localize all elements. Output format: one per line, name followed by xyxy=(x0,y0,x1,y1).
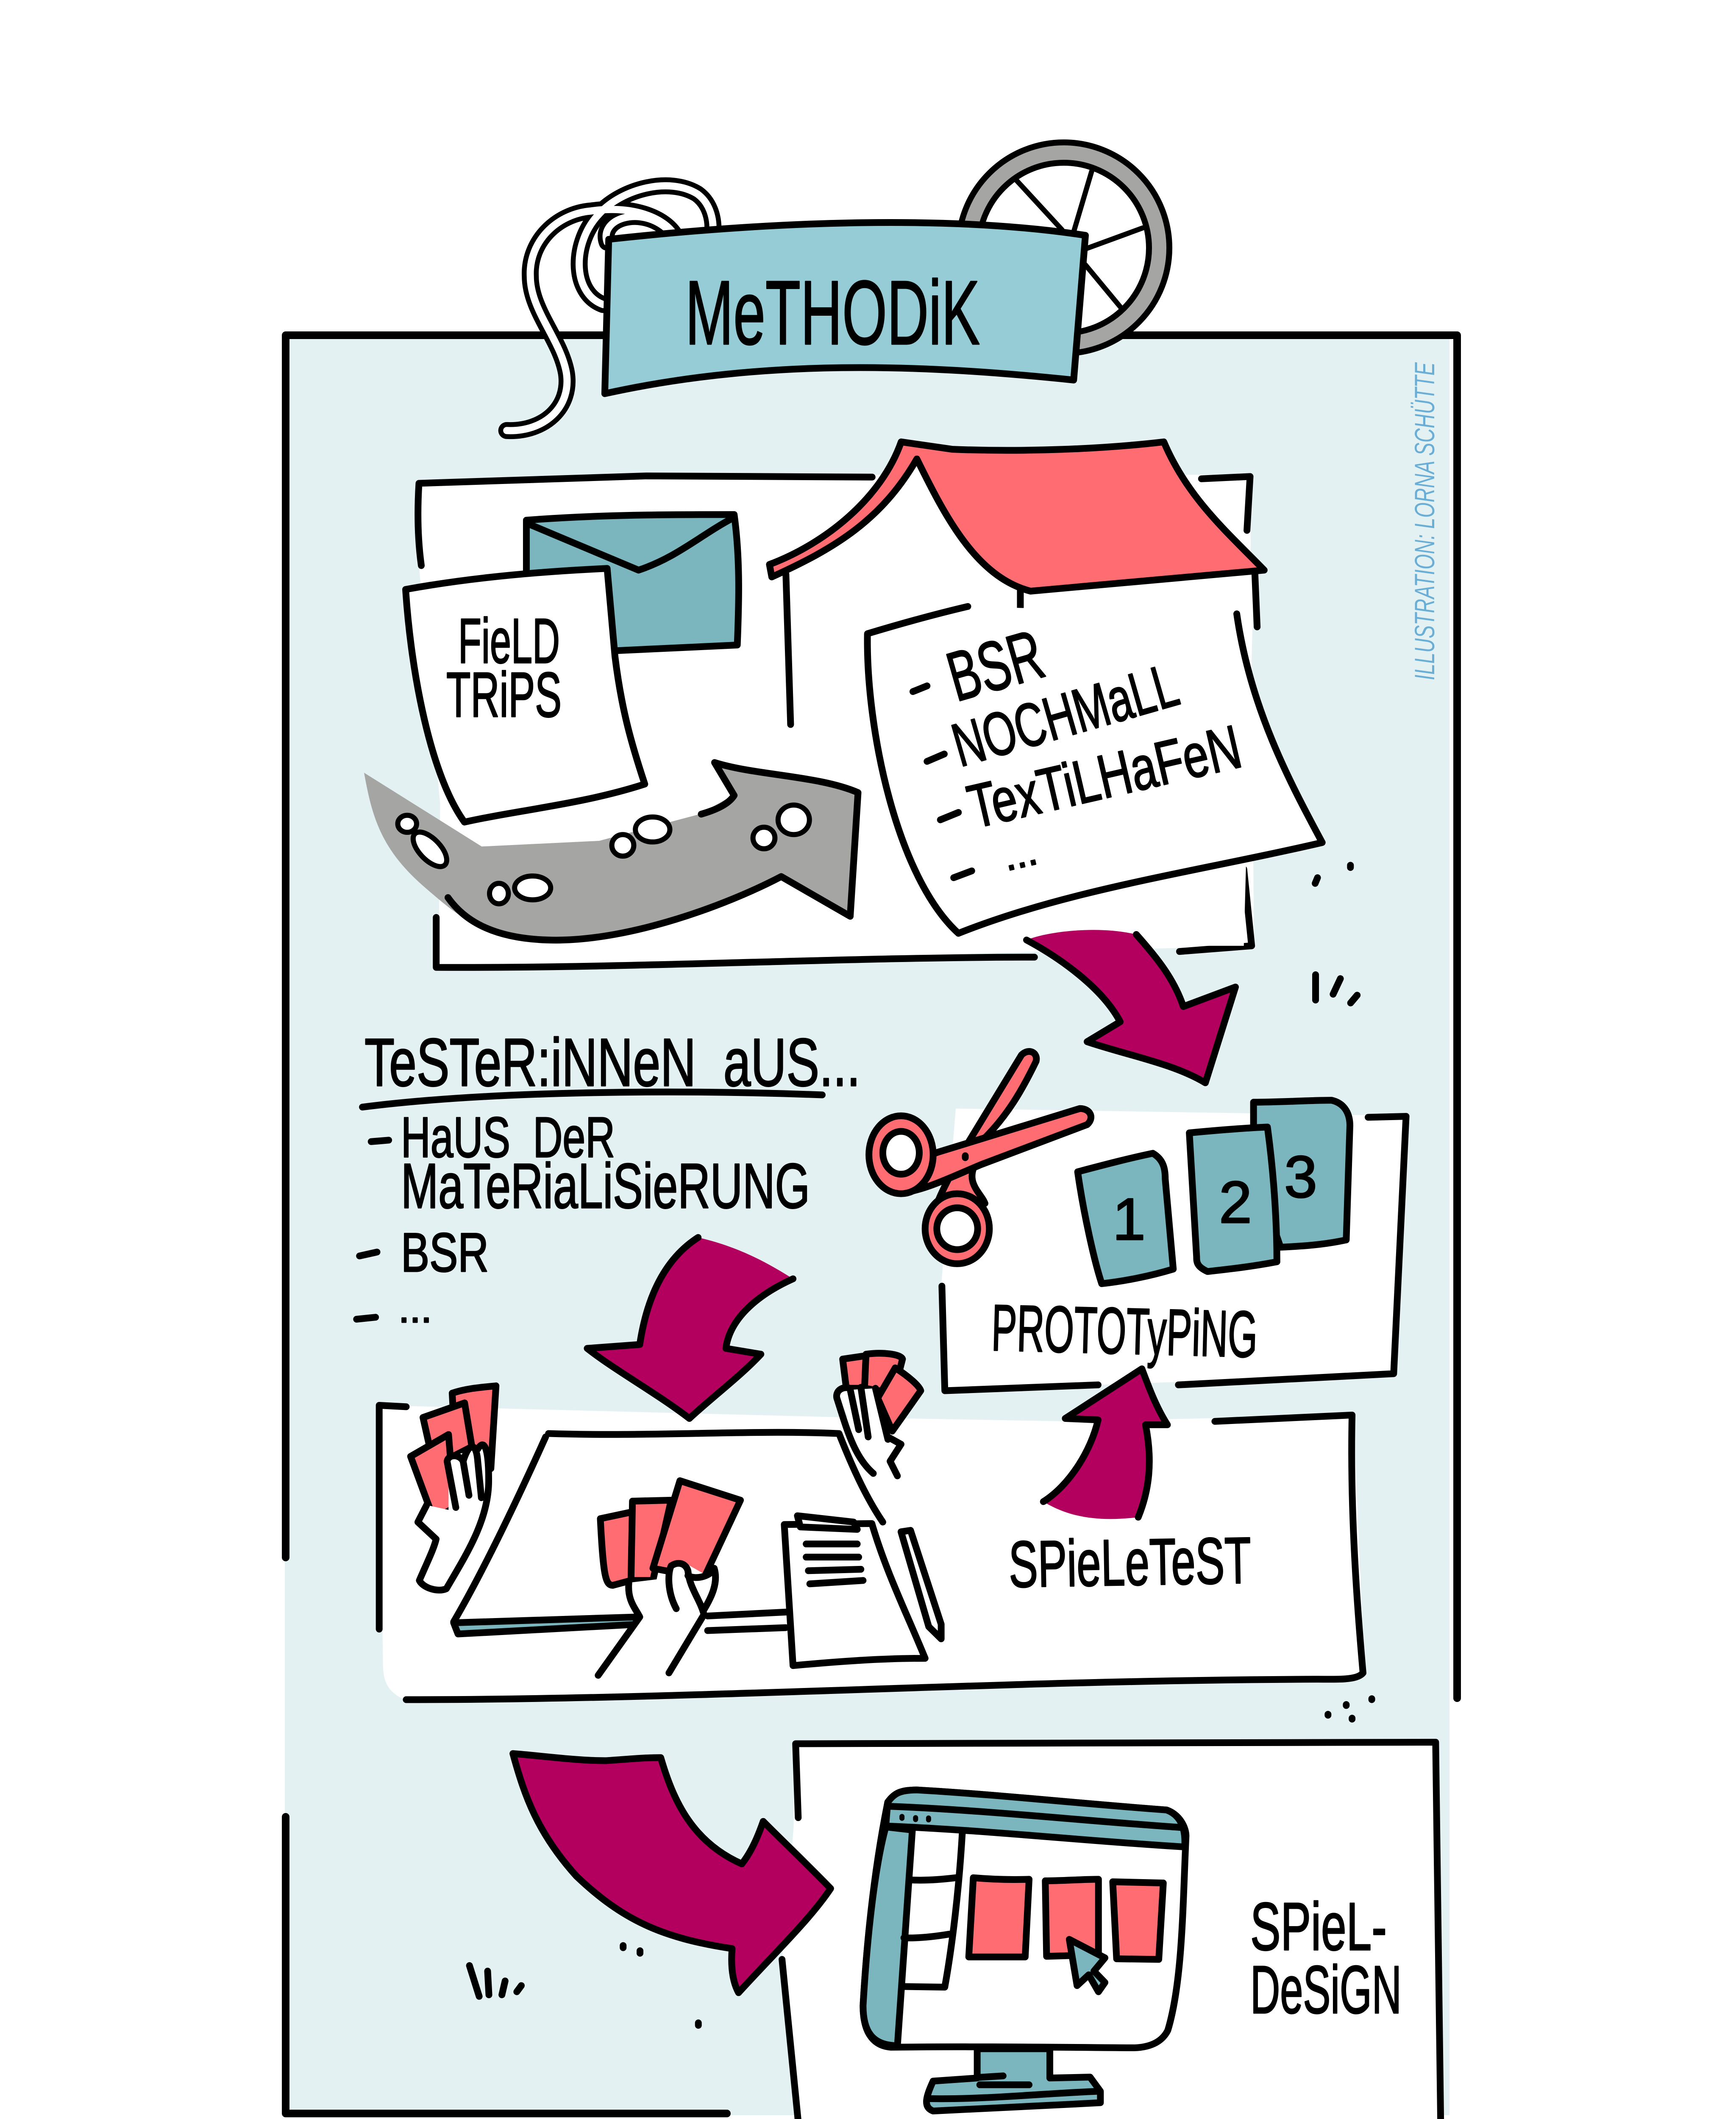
icon: card 2 xyxy=(1189,1127,1277,1271)
text: testers heading: TeSTeR:iNNeN aUS... xyxy=(364,1024,860,1100)
pink cards xyxy=(969,1878,1029,1957)
arrow: grey footsteps path xyxy=(364,762,858,940)
arrow outline xyxy=(587,1237,793,1418)
table xyxy=(453,1432,883,1622)
panel: game design xyxy=(782,1742,1442,2119)
text: nochmall: NOCHMaLL xyxy=(945,650,1185,780)
text: spieletest: SPieLeTeST xyxy=(1008,1524,1252,1601)
icon: cursor xyxy=(1069,1939,1105,1992)
icon: right hand with cards xyxy=(835,1353,921,1476)
list dashes xyxy=(356,1140,389,1319)
text: ellipsis: ... xyxy=(999,828,1041,879)
text: design: DeSiGN xyxy=(1250,1952,1402,2027)
icon: monitor stand xyxy=(926,2049,1100,2111)
stray dots xyxy=(1315,865,1350,883)
text: 3: 3 xyxy=(1284,1143,1317,1210)
text: materialisierung: MaTeRiaLiSieRUNG xyxy=(401,1150,810,1221)
underline xyxy=(362,1092,822,1107)
monitor sidebar xyxy=(863,1827,913,2046)
icon: center hand with cards xyxy=(598,1481,740,1675)
paper: locations list xyxy=(868,606,1322,933)
icon: left hand with cards xyxy=(411,1386,496,1590)
arrow: to prototyping xyxy=(1027,930,1235,1083)
outer frame xyxy=(286,335,1457,2113)
ticks and dots xyxy=(1316,975,1372,1719)
text: prototyping: PROTOTyPiNG xyxy=(990,1291,1258,1371)
title banner xyxy=(605,222,1085,394)
panel: light blue background xyxy=(285,335,1449,2115)
text: spiel: SPieL- xyxy=(1250,1888,1387,1964)
monitor top bar xyxy=(886,1790,1185,1847)
ticks and dots xyxy=(470,1946,698,2025)
arrow: game test to game design xyxy=(470,1754,831,2025)
house walls xyxy=(785,461,1254,946)
icon: wheel xyxy=(968,153,1159,343)
text: 1: 1 xyxy=(1113,1186,1146,1252)
icon: footprints xyxy=(398,805,810,904)
text: 2: 2 xyxy=(1219,1169,1252,1235)
text: bsr: BSR xyxy=(939,615,1052,716)
icon: clipboard xyxy=(784,1516,925,1666)
icon: envelope xyxy=(526,514,739,651)
icon: pencil xyxy=(901,1530,941,1639)
text: textilhafen: TexTiLHaFeN xyxy=(962,712,1247,841)
text: ellipsis: ... xyxy=(398,1286,432,1331)
icon: monitor xyxy=(863,1790,1186,2048)
panel: game test xyxy=(379,1353,1364,1700)
paper: field trips xyxy=(406,568,645,822)
icon: card 1 xyxy=(1078,1153,1173,1284)
text: bsr: BSR xyxy=(401,1221,489,1283)
icon: yarn xyxy=(507,186,713,431)
text: field: FieLD xyxy=(458,605,560,676)
text: trips: TRiPS xyxy=(446,659,562,730)
icon: card 3 xyxy=(1254,1100,1350,1247)
title: MeTHODiK xyxy=(685,261,980,364)
icon: roof xyxy=(769,442,1264,591)
arrow: tester to game test xyxy=(587,1237,793,1418)
icon: scissors xyxy=(869,1051,1091,1264)
arrow: game test to prototyping xyxy=(1043,1369,1167,1519)
list dashes xyxy=(913,686,972,878)
panel: field trips xyxy=(364,442,1350,968)
text: haus der: HaUS DeR xyxy=(401,1105,615,1169)
credit: ILLUSTRATION: LORNA SCHÜTTE xyxy=(1409,362,1440,680)
panel: testers xyxy=(356,1024,860,1331)
panel: prototyping xyxy=(869,1051,1406,1391)
